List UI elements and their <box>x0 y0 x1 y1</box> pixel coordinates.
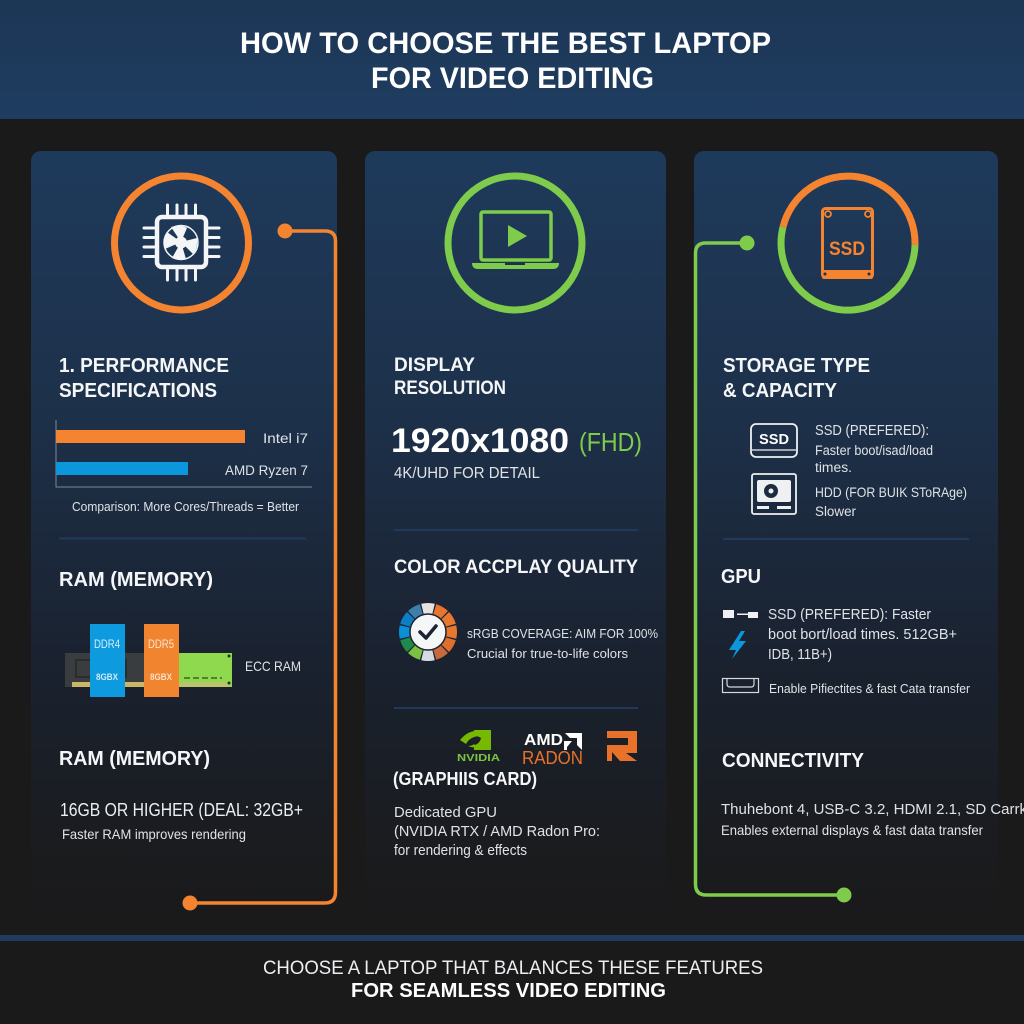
panel: storage <box>694 151 1024 926</box>
icon: ram modules: DDR5 <box>148 637 174 651</box>
heading: gpu: GPU <box>721 566 761 588</box>
text: ram recommendation <box>60 800 303 842</box>
logo: nvidia <box>457 730 500 764</box>
text: ram recommendation: 16GB OR HIGHER (DEAL: 32GB+ <box>60 800 303 820</box>
title: FOR VIDEO EDITING <box>371 62 654 95</box>
logo: amd radeon: RADON <box>522 748 583 768</box>
panel: performance <box>31 151 337 926</box>
heading: display resolution: DISPLAY <box>394 355 475 376</box>
stat: resolution: 1920x1080 <box>391 422 569 460</box>
text: gpu ssd: SSD (PREFERED): Faster <box>768 606 931 623</box>
heading: performance specifications <box>59 355 229 402</box>
text: ram recommendation: Faster RAM improves rendering <box>62 826 246 842</box>
footer text: CHOOSE A LAPTOP THAT BALANCES THESE FEATURES <box>263 958 763 979</box>
logo: r mark <box>607 731 637 761</box>
icon: color wheel check <box>404 608 452 656</box>
heading: storage type and capacity: STORAGE TYPE <box>723 355 870 377</box>
icon: ssd drive: SSD <box>759 431 789 448</box>
text: dedicated gpu: Dedicated GPU <box>394 804 497 821</box>
text: hdd bulk storage: Slower <box>815 503 856 519</box>
text: ssd preferred: Faster boot/isad/load <box>815 443 933 458</box>
label: ecc ram: ECC RAM <box>245 658 301 674</box>
text: connectivity ports <box>721 801 1024 838</box>
stat: resolution: 4K/UHD FOR DETAIL <box>394 465 540 482</box>
heading: connectivity: CONNECTIVITY <box>722 750 865 772</box>
icon: laptop with play <box>448 176 582 310</box>
icon: ram modules: 8GBX <box>96 672 118 682</box>
heading: graphics card: (GRAPHIIS CARD) <box>393 769 537 789</box>
text: gpu ssd <box>768 606 957 663</box>
text: connectivity ports: Enables external displays & fast data transfer <box>721 822 983 838</box>
text: dedicated gpu <box>394 804 600 859</box>
text: srgb coverage <box>467 626 658 661</box>
heading: ram memory: RAM (MEMORY) <box>59 569 213 591</box>
logo: nvidia: NVIDIA <box>457 752 500 764</box>
panel: display <box>365 151 666 926</box>
text: hdd bulk storage <box>815 484 967 519</box>
icon: hdd drive <box>752 474 796 514</box>
heading: display resolution: RESOLUTION <box>394 378 506 399</box>
icon: ssd ring: SSD <box>829 239 865 260</box>
bar chart: cpu comparison: Intel i7 <box>263 430 308 446</box>
text: dedicated gpu: for rendering & effects <box>394 842 527 859</box>
icon: ram modules <box>65 624 232 697</box>
icon: ram modules: DDR4 <box>94 637 120 651</box>
text: ssd preferred: SSD (PREFERED): <box>815 422 929 439</box>
footer text <box>263 958 763 1002</box>
heading: performance specifications: SPECIFICATIONS <box>59 380 217 402</box>
logo: amd radeon: AMD <box>524 732 563 749</box>
text: connectivity ports: Thuhebont 4, USB-C 3.2, HDMI 2.1, SD Carrk <box>721 801 1024 818</box>
text: enable effects: Enable Pifiectites & fast Cata transfer <box>769 681 971 696</box>
heading: storage type and capacity <box>723 355 870 402</box>
arrow: green connector <box>696 236 852 902</box>
text: srgb coverage: Crucial for true-to-life colors <box>467 646 629 661</box>
text: srgb coverage: sRGB COVERAGE: AIM FOR 100% <box>467 626 658 641</box>
icon: lightning bolt <box>729 631 746 659</box>
footer <box>0 935 1024 1002</box>
stat: resolution: (FHD) <box>579 427 642 457</box>
heading: display resolution <box>394 355 506 399</box>
icon: port <box>722 678 758 692</box>
text: gpu ssd: IDB, 11B+) <box>768 646 832 663</box>
header banner <box>0 0 1024 119</box>
heading: color display quality: COLOR ACCPLAY QUALITY <box>394 557 638 578</box>
icon: ssd ring <box>781 176 915 310</box>
text: dedicated gpu: (NVIDIA RTX / AMD Radon Pro: <box>394 823 600 840</box>
title: HOW TO CHOOSE THE BEST LAPTOP <box>240 27 771 60</box>
icon: connector <box>723 610 758 618</box>
icon: ssd drive <box>751 424 797 457</box>
icon: cpu with fan <box>114 176 248 310</box>
text: hdd bulk storage: HDD (FOR BUIK SToRAge) <box>815 484 967 500</box>
footer text: FOR SEAMLESS VIDEO EDITING <box>351 980 666 1002</box>
heading: ram memory second: RAM (MEMORY) <box>59 748 210 770</box>
caption: comparison: Comparison: More Cores/Threads = Better <box>72 499 300 514</box>
stat: resolution <box>391 422 642 482</box>
text: gpu ssd: boot bort/load times. 512GB+ <box>768 626 957 643</box>
title <box>240 27 771 95</box>
heading: performance specifications: 1. PERFORMANCE <box>59 355 229 377</box>
bar chart: cpu comparison: AMD Ryzen 7 <box>225 462 308 478</box>
logo: amd radeon <box>522 732 583 768</box>
bar chart: cpu comparison <box>56 420 312 487</box>
text: ssd preferred <box>815 422 933 475</box>
arrow: orange connector <box>182 224 336 910</box>
icon: ram modules: 8GBX <box>150 672 172 682</box>
text: ssd preferred: times. <box>815 460 852 475</box>
heading: storage type and capacity: & CAPACITY <box>723 380 838 402</box>
